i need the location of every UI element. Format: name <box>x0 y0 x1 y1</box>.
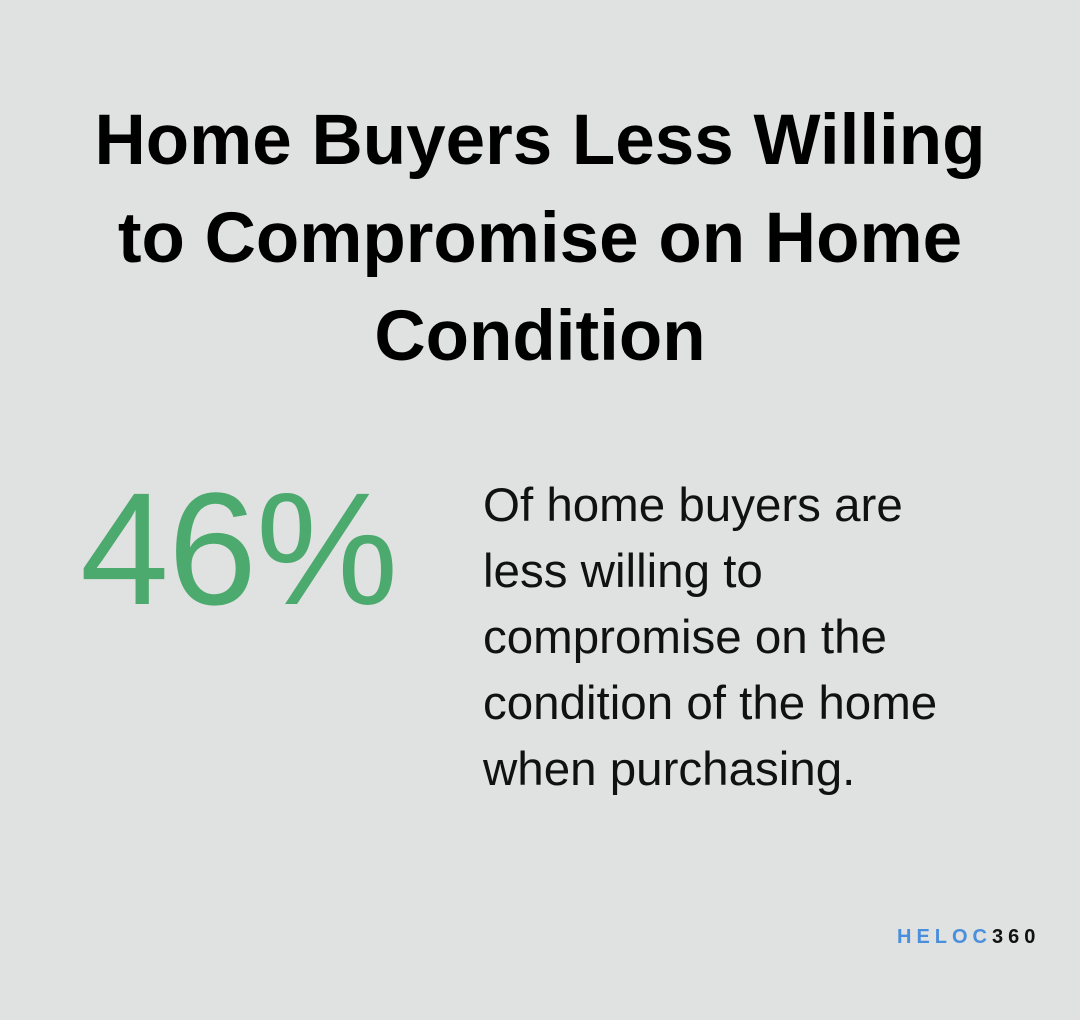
big stat: 46% <box>80 459 397 638</box>
description text: less willing to <box>483 545 763 598</box>
description text <box>483 479 937 796</box>
logo: HELOC360 <box>897 926 1040 948</box>
description text: condition of the home <box>483 677 937 730</box>
title: Condition <box>374 297 706 376</box>
description text: compromise on the <box>483 611 887 664</box>
description text: when purchasing. <box>483 743 855 796</box>
title: to Compromise on Home <box>118 199 962 278</box>
title: Home Buyers Less Willing <box>94 101 986 180</box>
title <box>94 101 986 376</box>
description text: Of home buyers are <box>483 479 903 532</box>
